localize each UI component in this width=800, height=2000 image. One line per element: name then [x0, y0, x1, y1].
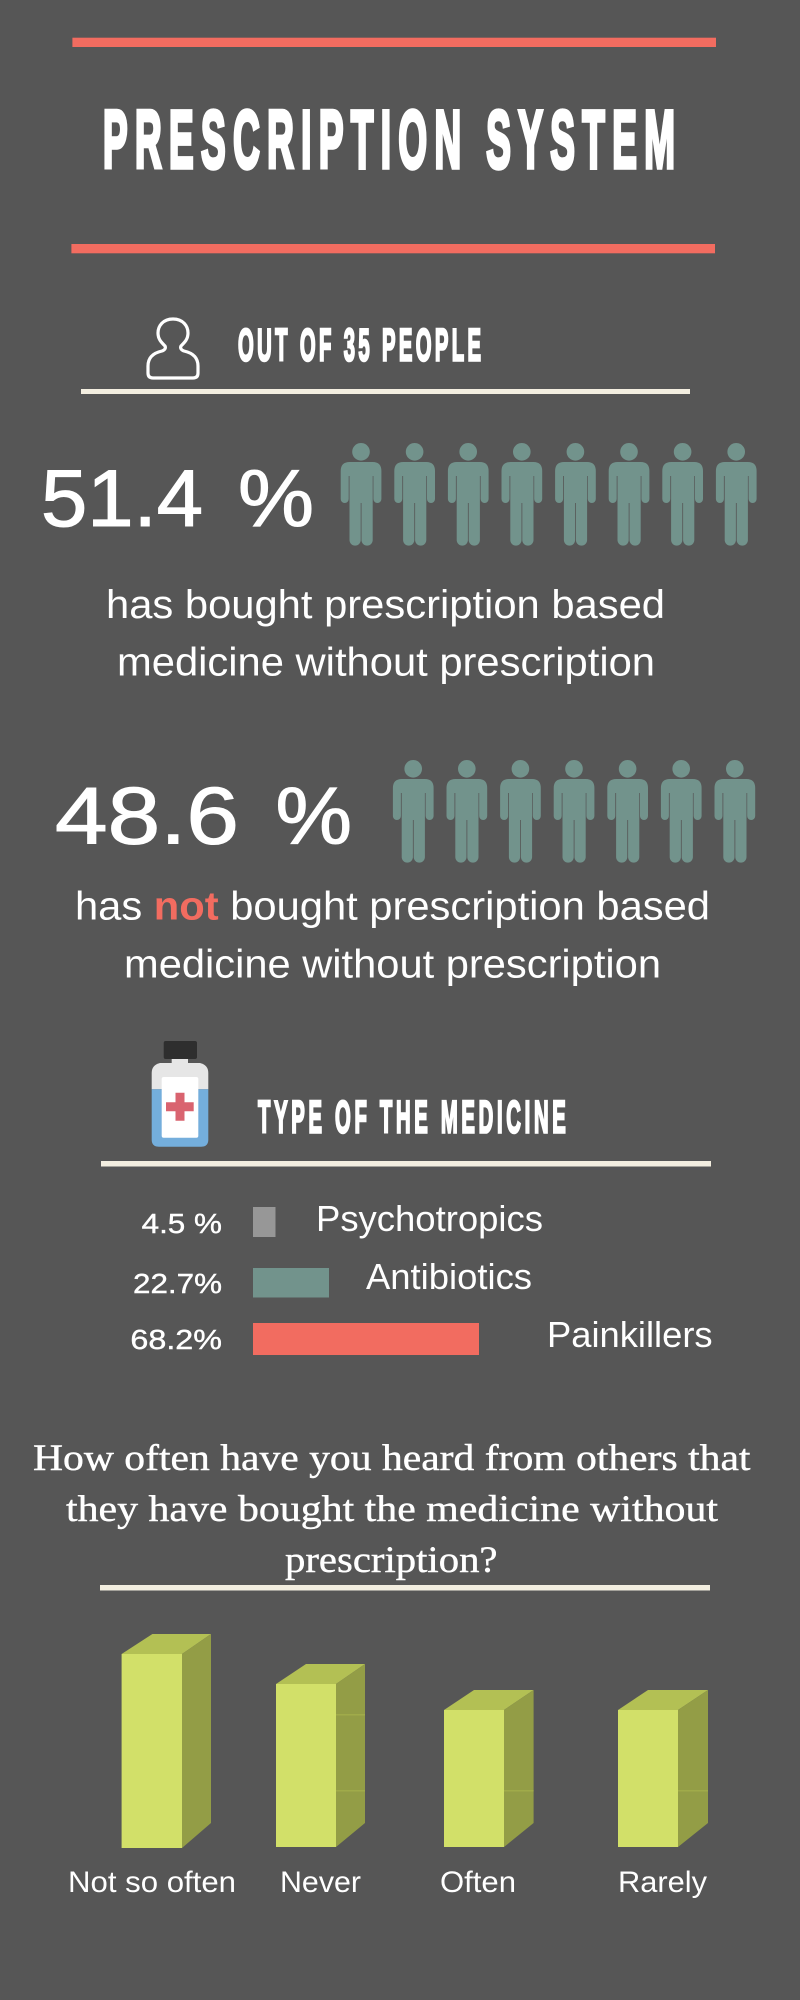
bar labels: Never [280, 1866, 361, 1899]
row: psychotropics: 4.5 % [142, 1208, 222, 1239]
row: painkillers: 68.2% [130, 1324, 222, 1355]
heading: type of the medicine: TYPE OF THE MEDICINE [258, 1093, 566, 1143]
question text: How often have you heard from others that [33, 1438, 751, 1479]
text: has bought: has bought prescription based [106, 583, 665, 627]
divider under people heading [81, 389, 690, 394]
row: antibiotics [133, 1256, 532, 1299]
text: has not bought: medicine without prescription [124, 943, 661, 987]
divider under question [100, 1585, 710, 1590]
text: has not bought: has not bought prescription based [75, 884, 710, 928]
divider under medicine heading [101, 1161, 711, 1166]
pictogram: 8 people [341, 443, 757, 546]
row: antibiotics: 22.7% [133, 1268, 222, 1299]
bar: rarely [618, 1690, 708, 1847]
stat: 48.6 percent: 48.6 [55, 772, 239, 862]
text: has not bought [75, 884, 710, 987]
row: psychotropics [142, 1198, 543, 1239]
row: painkillers: Painkillers [547, 1314, 713, 1355]
question text: they have bought the medicine without [66, 1489, 719, 1530]
question text [33, 1438, 751, 1581]
row: antibiotics: Antibiotics [366, 1256, 532, 1297]
bar: not so often [122, 1634, 211, 1848]
heading: out of 35 people: OUT OF 35 PEOPLE [238, 321, 481, 371]
stat: 48.6 percent: % [276, 772, 352, 862]
question text: prescription? [285, 1540, 498, 1581]
bar labels [68, 1866, 707, 1899]
pictogram: 7 people [393, 760, 755, 863]
bar labels: Not so often [68, 1866, 236, 1899]
title: PRESCRIPTION SYSTEM [103, 94, 675, 186]
3D bar chart [122, 1634, 708, 1848]
bar: never [276, 1664, 365, 1847]
bar: often [444, 1690, 534, 1847]
lower accent bar [71, 244, 715, 253]
stat: 51.4 percent: 51.4 [41, 454, 203, 544]
bar labels: Rarely [618, 1866, 707, 1899]
icon: medicine bottle [152, 1041, 208, 1147]
stat: 51.4 percent: % [238, 454, 314, 544]
bar labels: Often [440, 1866, 516, 1899]
row: psychotropics: Psychotropics [316, 1198, 543, 1239]
top accent bar [72, 38, 716, 47]
text: has bought: medicine without prescription [117, 641, 655, 685]
icon: person outline [148, 319, 198, 378]
row: painkillers [130, 1314, 713, 1355]
text: has bought [106, 583, 665, 685]
